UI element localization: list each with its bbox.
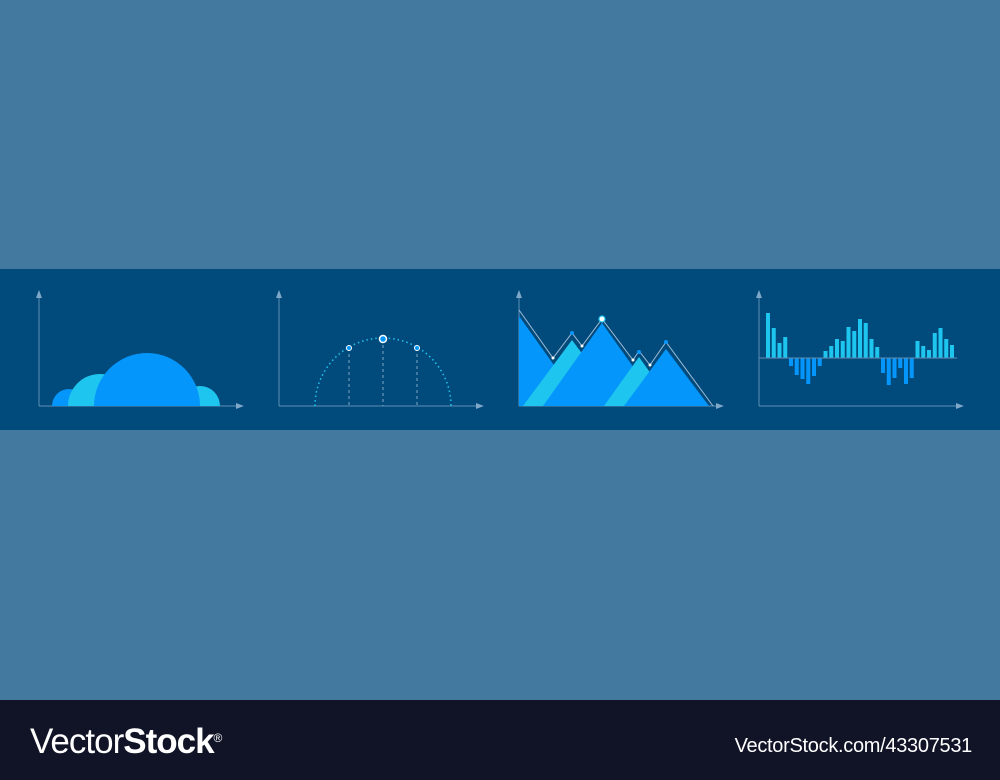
chart 2: dotted arc with points — [279, 294, 480, 406]
image id text: VectorStock.com/43307531 — [735, 735, 972, 757]
background band with charts — [0, 269, 1000, 430]
footer — [0, 700, 1000, 780]
chart 3: mountain area chart — [519, 294, 720, 406]
chart 4: positive/negative bar chart — [759, 294, 960, 406]
chart 1: overlapping semicircles — [39, 294, 240, 406]
logo text: VectorStock® — [30, 722, 221, 761]
